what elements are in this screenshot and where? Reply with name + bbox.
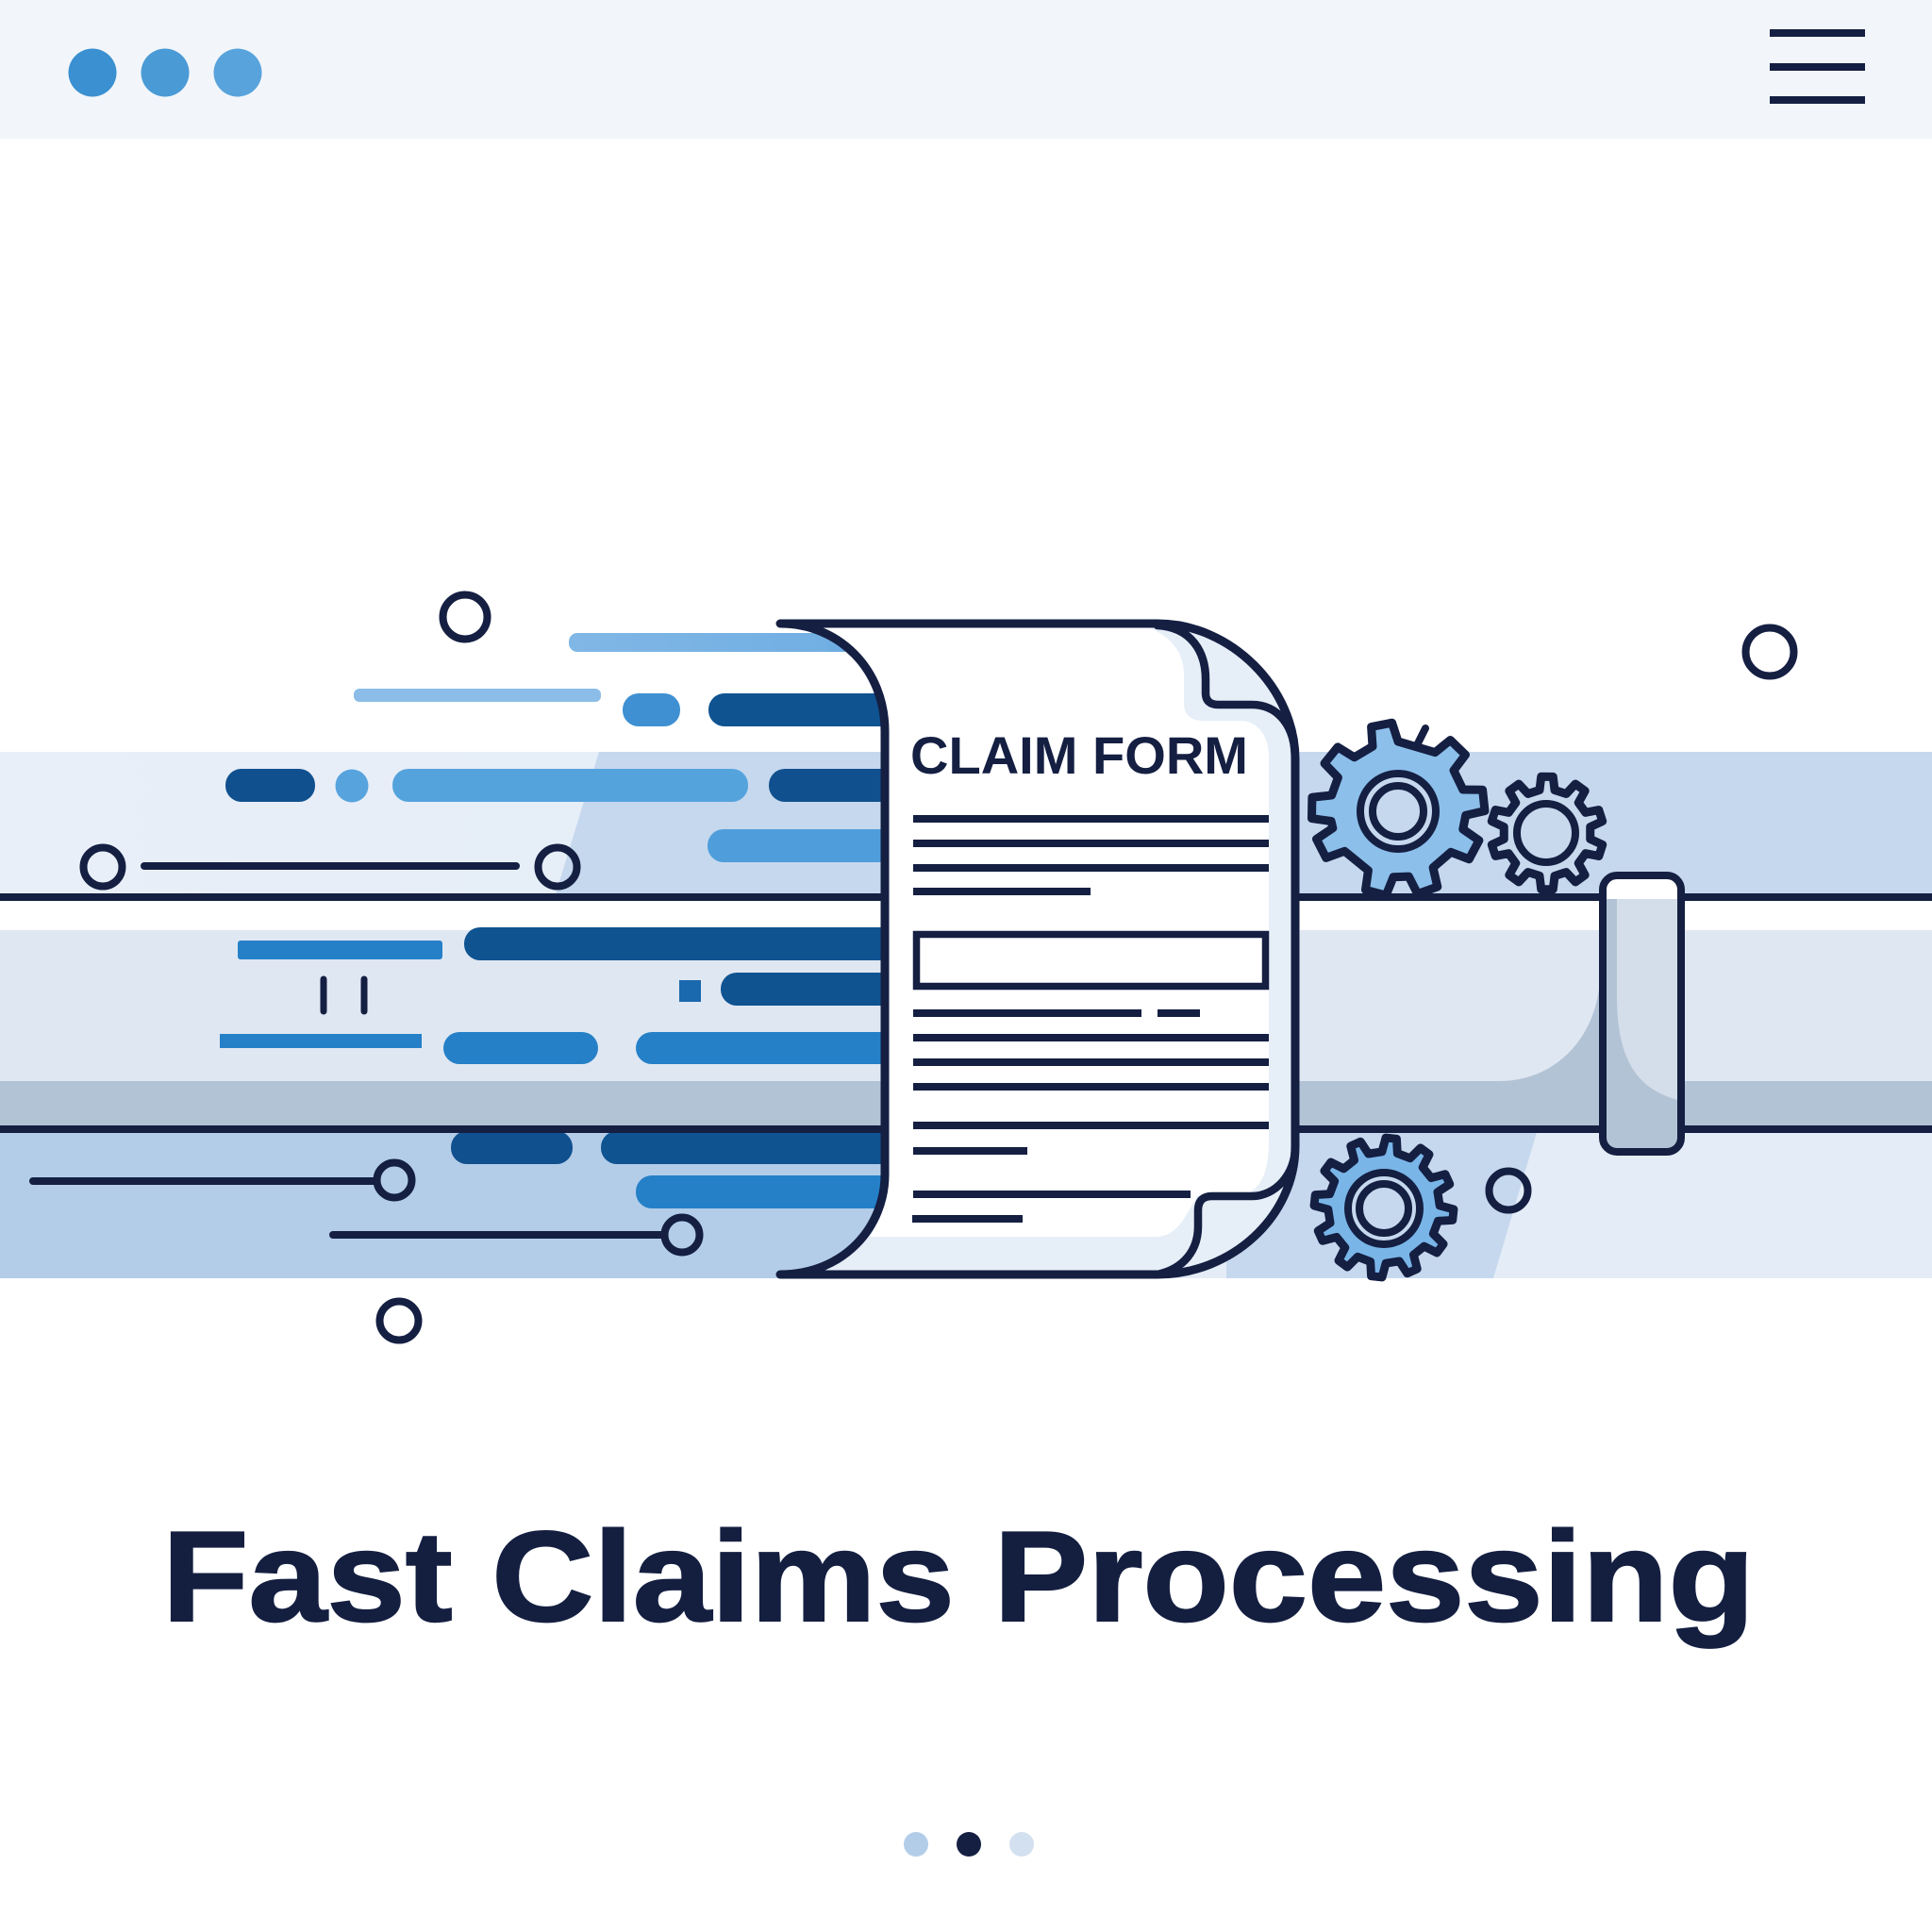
form input box	[917, 934, 1266, 987]
top page curl	[1158, 625, 1295, 759]
pipe outlines	[0, 893, 1932, 1133]
background pipeline bands	[0, 752, 1932, 1278]
connector lines with node rings	[33, 847, 700, 1253]
gear: small outline	[1476, 763, 1618, 903]
pipe clamp	[1603, 875, 1681, 1152]
page white interior	[780, 624, 1269, 1237]
floating rings	[379, 594, 1794, 1340]
form title: CLAIM FORM	[910, 725, 1248, 785]
gear: large top	[1311, 723, 1485, 895]
pagination dots	[904, 1832, 1034, 1857]
motion streak bars	[220, 633, 912, 1208]
tick marks	[324, 979, 364, 1011]
header bar	[0, 0, 1932, 139]
document page fill	[780, 624, 1295, 1274]
claim form document	[780, 624, 1295, 1274]
gear: lower	[1307, 1131, 1460, 1284]
bottom page curl	[1158, 1146, 1295, 1274]
header dots	[68, 49, 262, 96]
form text lines	[912, 815, 1269, 1223]
page outline	[780, 624, 1295, 1274]
main title: Fast Claims Processing	[162, 1505, 1755, 1648]
hamburger menu icon	[1770, 29, 1865, 104]
